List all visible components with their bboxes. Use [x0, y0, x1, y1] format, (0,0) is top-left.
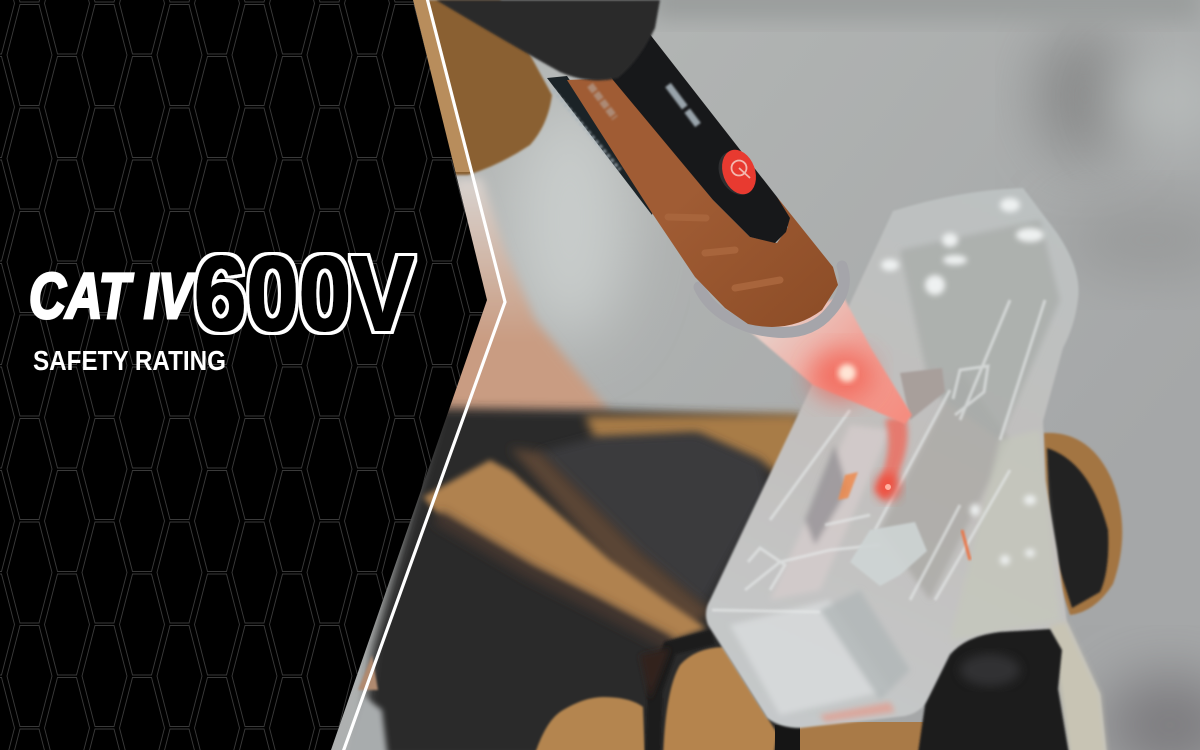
- glove texture highlights: [960, 654, 1020, 686]
- white chevron line: [343, 0, 505, 750]
- icon: red power button: [711, 145, 763, 201]
- pen: strip text marks: [553, 90, 620, 170]
- tester: grey ring: [699, 266, 844, 332]
- tester: glowing tip: [747, 296, 912, 424]
- fingertip: lighter tan sliver left of the chevron: [413, 0, 470, 172]
- transparent plug body: [706, 188, 1107, 750]
- pen: model marks: [668, 85, 698, 125]
- subtitle: safety rating: SAFETY RATING: [33, 345, 226, 376]
- plug: tab: [850, 522, 927, 586]
- pen: label strip: [547, 76, 654, 215]
- plug: grey block behind tip: [900, 368, 945, 420]
- lower glove: dark base: [345, 408, 925, 750]
- black panel with hexagon pattern: [0, 0, 487, 750]
- right glove finger: [1043, 433, 1122, 615]
- top black glove: [436, 0, 660, 80]
- pen: grip ribs: [668, 217, 780, 288]
- plug: red reflection: [820, 415, 970, 722]
- plug: highlights: [881, 198, 1044, 565]
- top fingertip: tan glove: [415, 0, 552, 175]
- title: 600V outlined: 600V: [194, 235, 414, 353]
- title: CAT IV: CAT IV: [29, 260, 196, 332]
- plug: interior shading: [730, 220, 1060, 715]
- bottom-right black glove: [917, 629, 1070, 750]
- pen: black body: [600, 28, 790, 243]
- voltage tester pen: [547, 28, 838, 327]
- plug: moulded ridges: [712, 300, 1045, 612]
- pen: brown grip: [567, 78, 838, 327]
- bottom-right cream strip: [1050, 622, 1107, 750]
- skin-tone blur behind the glove: [430, 178, 612, 425]
